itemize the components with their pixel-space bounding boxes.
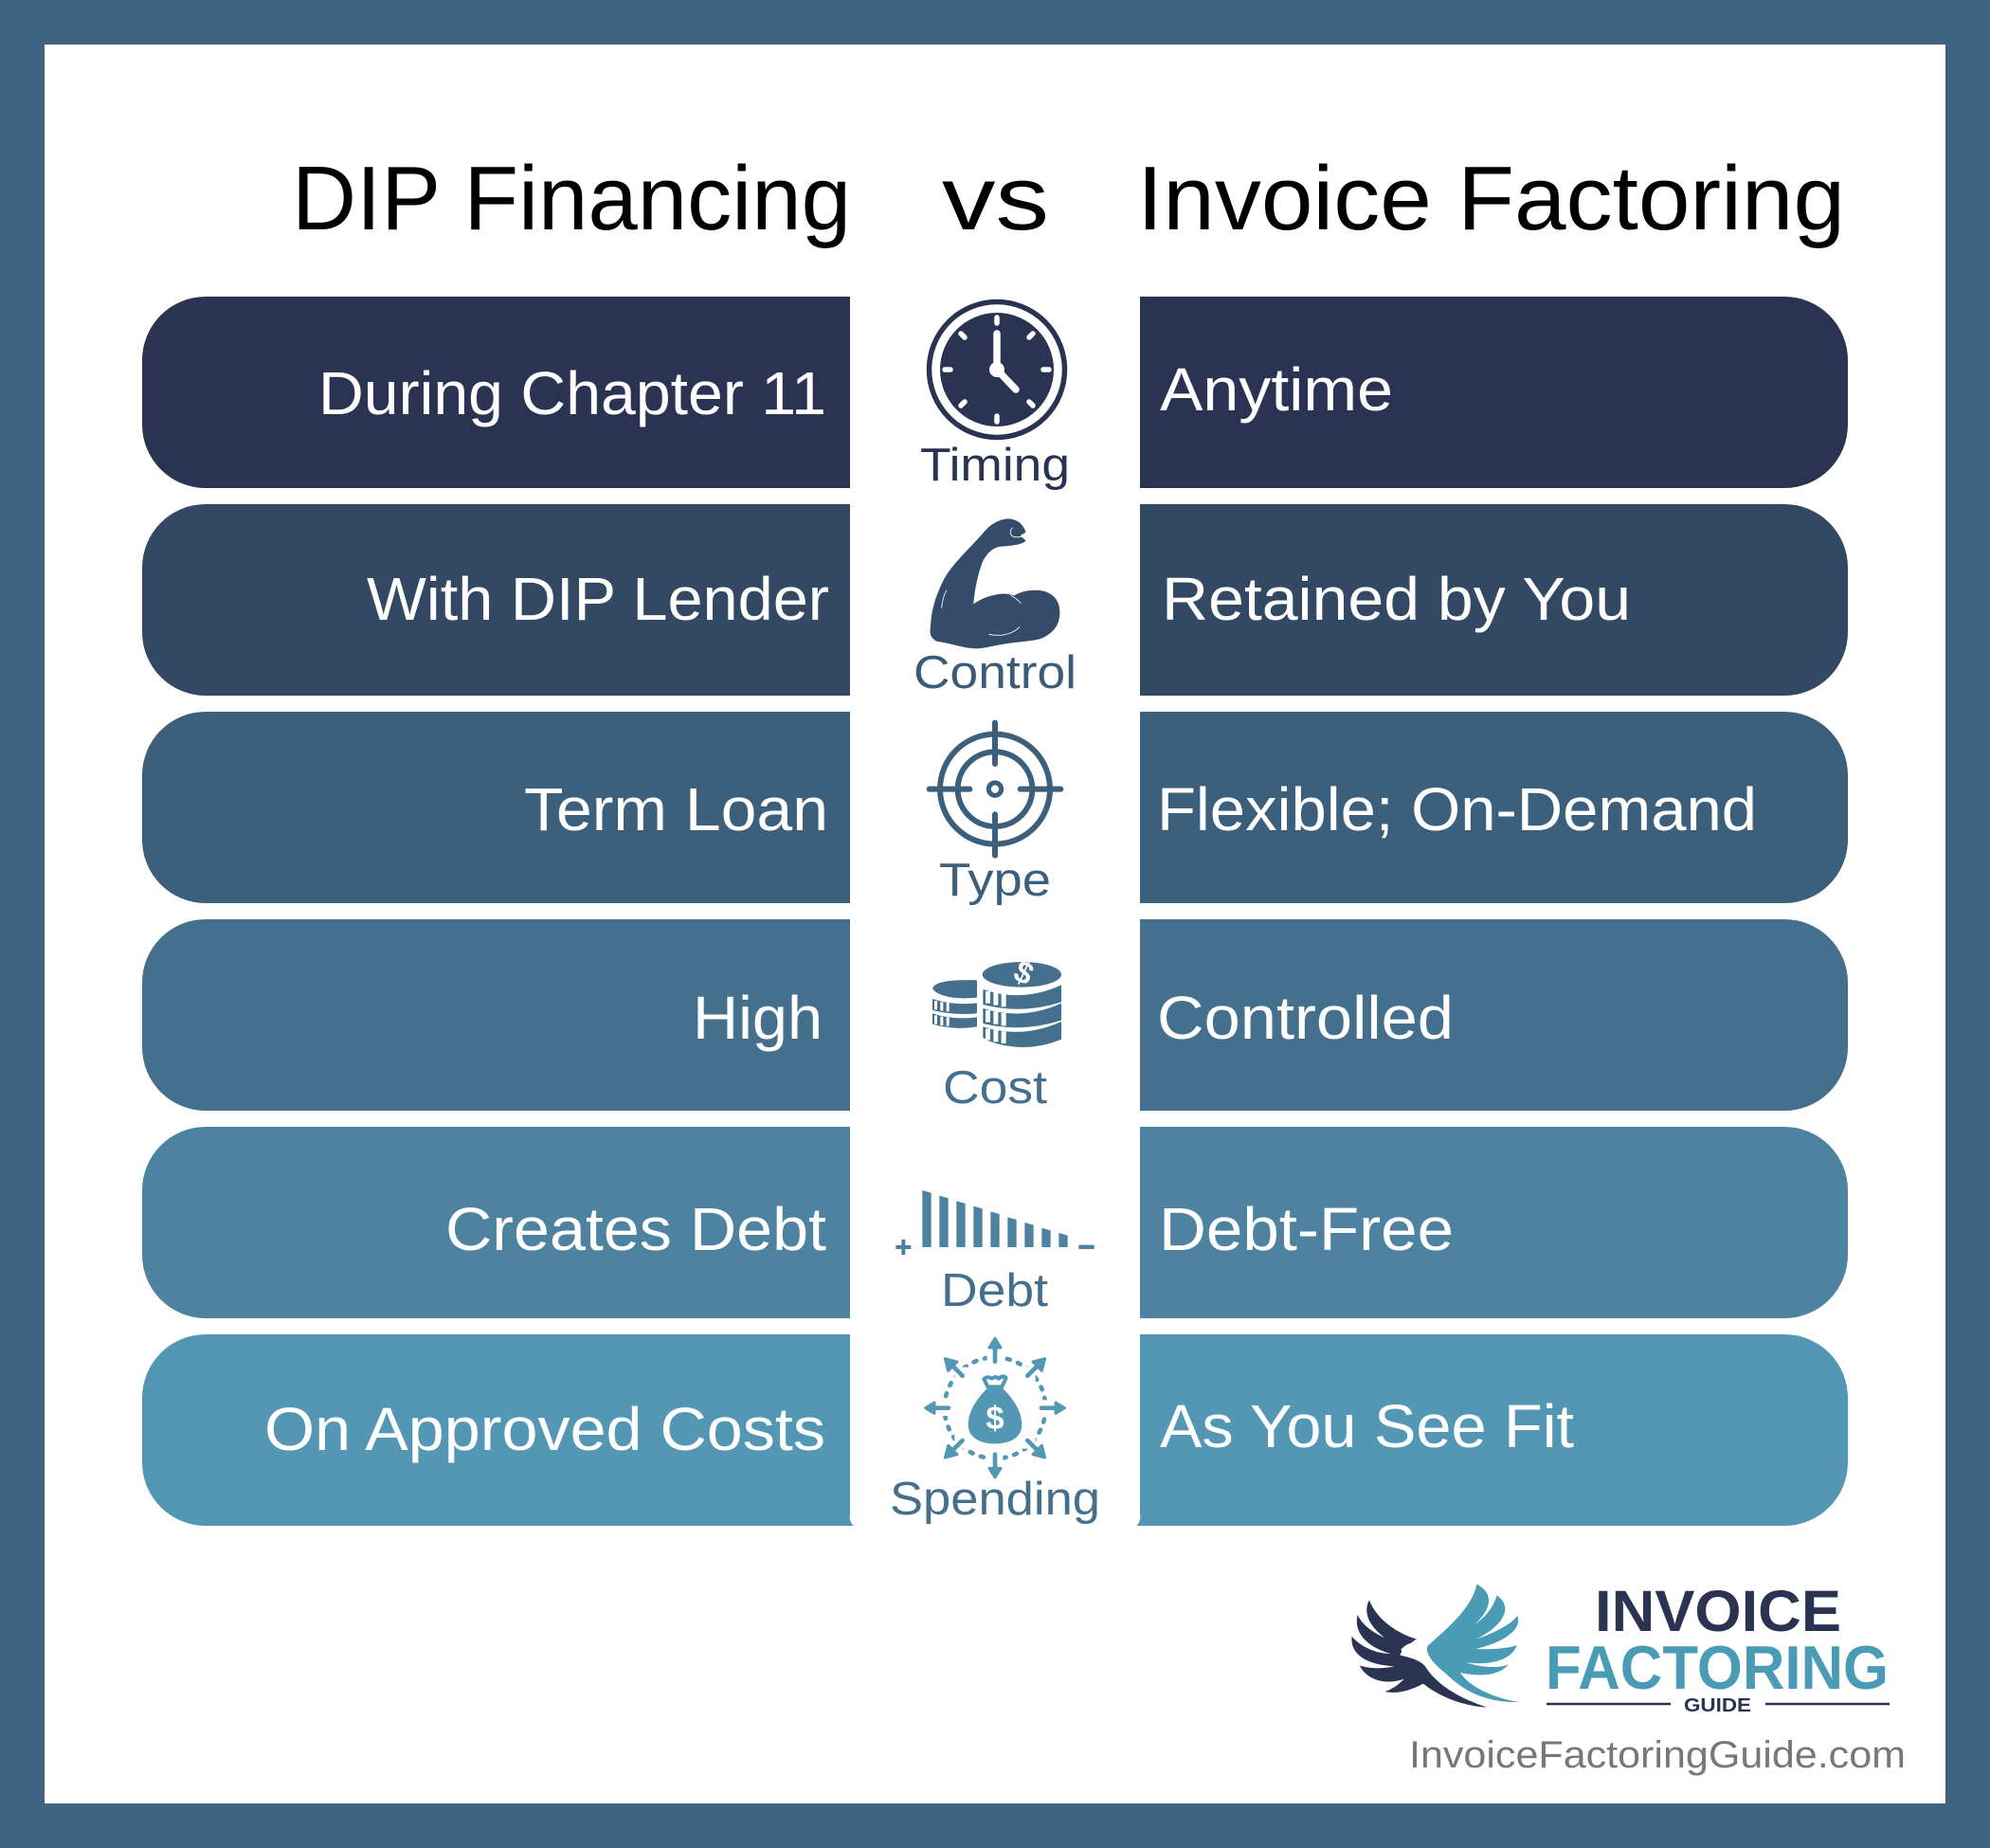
label: control: Control: [914, 647, 1076, 698]
icon: money bag with arrows: $: [986, 1401, 1004, 1437]
title: [292, 148, 1845, 249]
title: Invoice Factoring: [1137, 148, 1845, 249]
icon: coin stacks: [932, 952, 1061, 1047]
row: debt: [142, 1127, 1848, 1318]
label: spending: Spending: [890, 1474, 1100, 1525]
logo: wordmark: FACTORING: [1546, 1633, 1889, 1702]
row: type: [142, 712, 1848, 903]
row: spending: As You See Fit: [1160, 1392, 1574, 1460]
label: debt: Debt: [941, 1265, 1048, 1316]
label: type: Type: [939, 855, 1051, 906]
logo: wordmark: [1546, 1579, 1890, 1716]
row: control: Retained by You: [1162, 565, 1631, 633]
label: cost: Cost: [943, 1062, 1047, 1114]
row: spending: On Approved Costs: [264, 1395, 825, 1463]
row: debt: Debt-Free: [1159, 1195, 1454, 1263]
logo: wordmark: INVOICE: [1595, 1579, 1841, 1643]
title: vs: [942, 148, 1049, 249]
row: timing: [142, 297, 1848, 488]
row: control: [142, 504, 1848, 696]
logo: [1351, 1579, 1890, 1716]
row: type: Flexible; On-Demand: [1157, 775, 1757, 843]
row: timing: Anytime: [1160, 355, 1393, 424]
row: type: Term Loan: [524, 775, 828, 843]
row: debt: Creates Debt: [445, 1195, 826, 1263]
row: cost: Controlled: [1157, 984, 1454, 1052]
logo: wordmark: GUIDE: [1684, 1695, 1751, 1716]
label: timing: Timing: [920, 440, 1070, 491]
icon: coin stacks: $: [1009, 952, 1040, 992]
row: spending: [142, 1334, 1848, 1526]
icon: money bag with arrows: [926, 1338, 1064, 1477]
icon: clock: [929, 301, 1065, 438]
row: cost: High: [693, 984, 823, 1052]
row: control: With DIP Lender: [367, 565, 829, 633]
website url: InvoiceFactoringGuide.com: [1409, 1734, 1906, 1776]
icon: flexed arm: [931, 518, 1059, 648]
icon: declining bars: [896, 1190, 1094, 1255]
title: DIP Financing: [292, 148, 851, 249]
row: timing: During Chapter 11: [318, 359, 826, 427]
row: cost: [142, 919, 1848, 1111]
logo: eagle: [1351, 1585, 1519, 1708]
icon: target: [930, 723, 1060, 856]
